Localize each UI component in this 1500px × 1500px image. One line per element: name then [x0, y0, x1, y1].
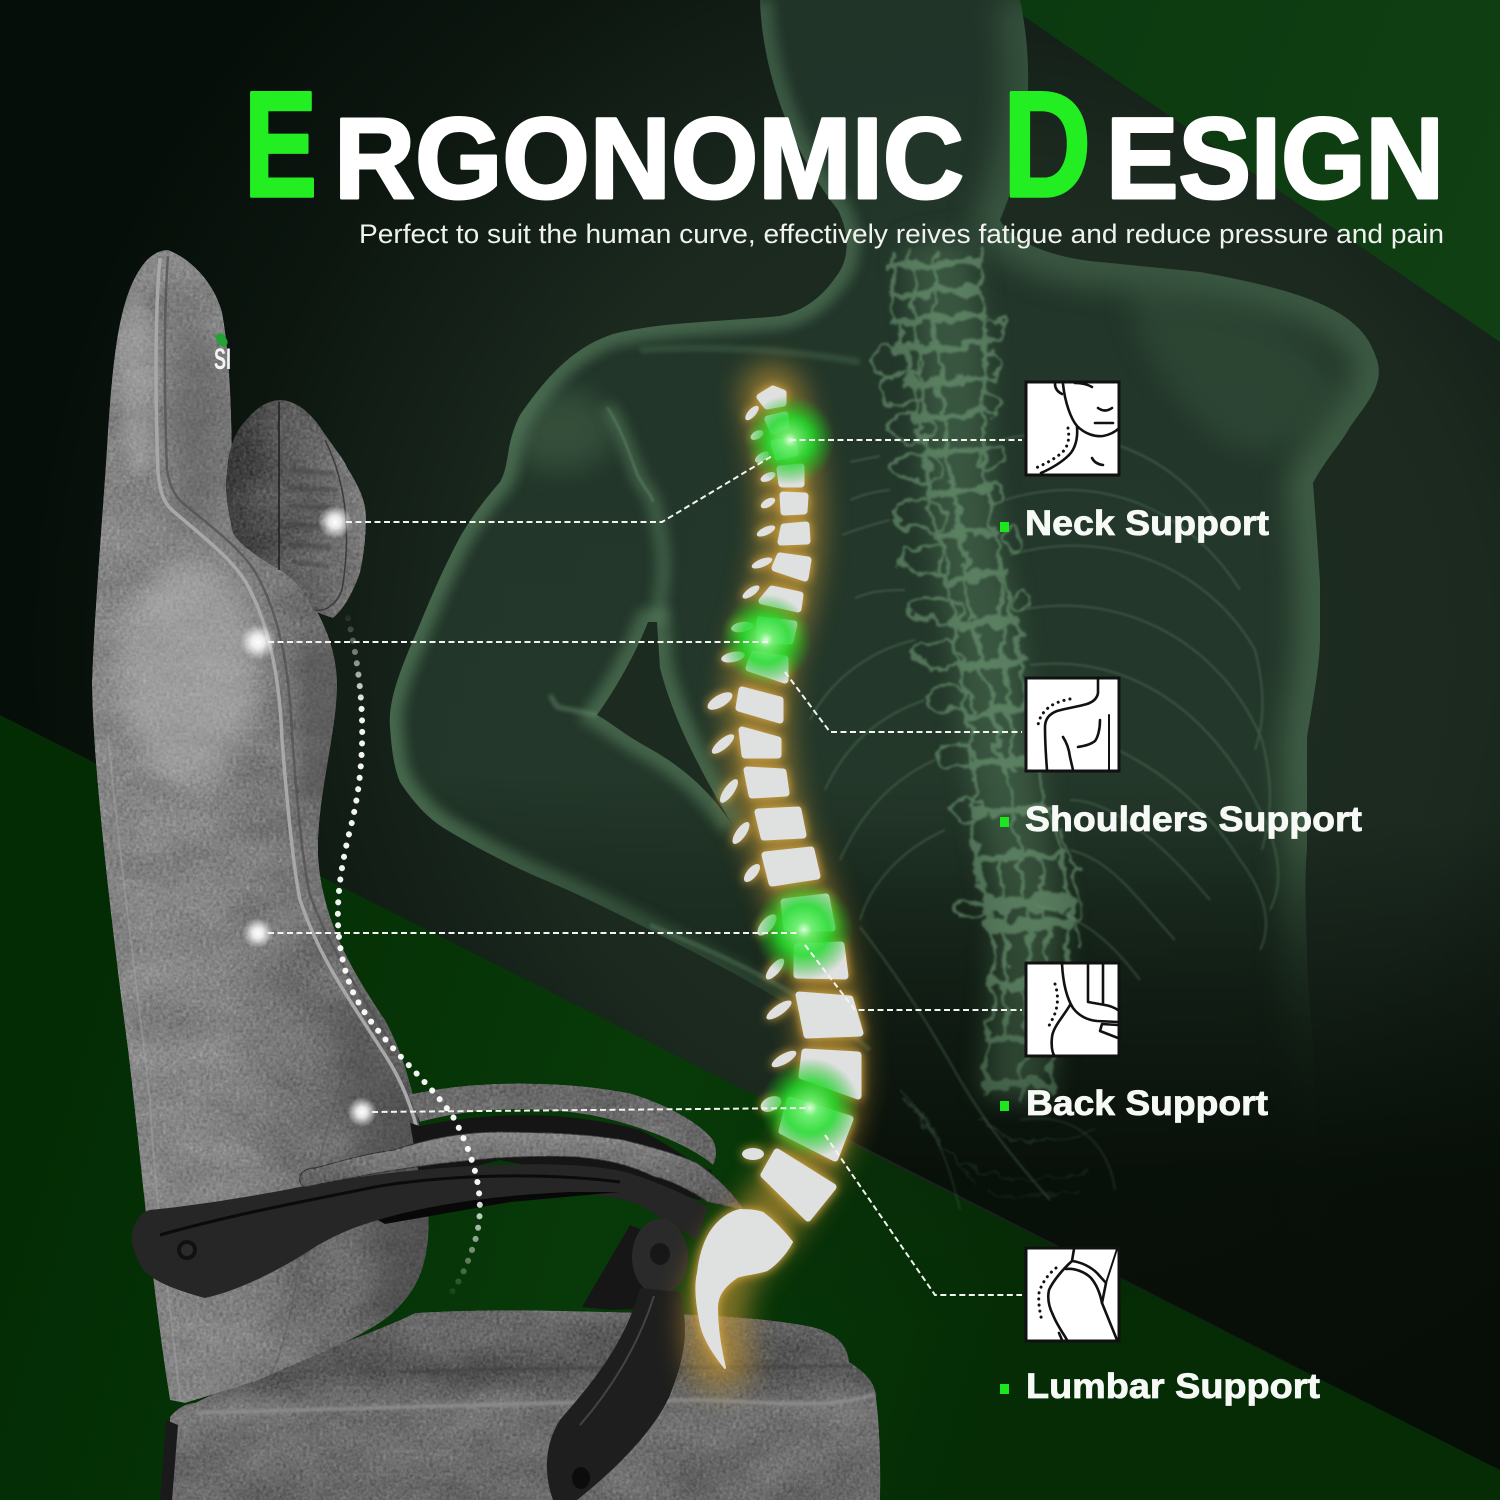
subtitle: Perfect to suit the human curve, effectively reives fatigue and reduce pressure and pain: [359, 219, 1444, 249]
title: RGONOMIC: [334, 95, 964, 223]
title: ESIGN: [1106, 95, 1444, 223]
bullet: [1000, 817, 1009, 827]
green pressure glows: [720, 395, 860, 1158]
dashed leader lines: [268, 440, 1022, 1295]
white chair points: [240, 505, 377, 1127]
bullet: [1000, 1101, 1009, 1111]
spine glow band: [715, 395, 832, 1360]
bullet: [1000, 522, 1009, 532]
bullet: [1000, 1384, 1009, 1394]
chair back: [92, 250, 429, 1403]
human body silhouette: [390, 0, 1379, 1002]
front armrest pad: [300, 1132, 744, 1210]
feature: lumbar support: [1000, 1248, 1320, 1406]
lower darkening: [800, 820, 1500, 1470]
brand logo: [214, 333, 231, 376]
feature: back support: [1000, 963, 1268, 1123]
back armrest: [408, 1083, 716, 1200]
support strut: [582, 1225, 668, 1310]
title: E: [244, 60, 317, 228]
title: [244, 60, 1444, 228]
left processes: [871, 343, 986, 916]
rails: [890, 250, 1070, 1100]
right processes: [980, 318, 1080, 950]
chair back shading: [108, 256, 440, 1400]
icon: neck: [1026, 382, 1119, 475]
title: D: [1003, 60, 1091, 228]
icon: back: [1026, 963, 1119, 1056]
spine bones: [696, 389, 860, 1368]
label: Shoulders Support: [1025, 800, 1362, 839]
neck pillow: [226, 400, 366, 618]
icon: lumbar: [1026, 1248, 1119, 1341]
gaming chair: [92, 250, 880, 1500]
cross bars: [890, 262, 1070, 1085]
label: Lumbar Support: [1026, 1367, 1320, 1406]
pelvis: [905, 1100, 1090, 1197]
label: Back Support: [1026, 1084, 1268, 1123]
feature: shoulders support: [1000, 678, 1362, 839]
brand logo: SI: [214, 343, 231, 376]
chair seat base: [168, 1310, 880, 1500]
feature: neck support: [1000, 382, 1269, 543]
front armrest black: [132, 1164, 708, 1298]
rib cage: [650, 434, 1278, 1210]
icon: shoulder: [1026, 678, 1119, 771]
arm pivot and leg: [547, 1219, 688, 1500]
x-ray spine: [871, 240, 1090, 1197]
dotted posture curve: [338, 618, 480, 1292]
label: Neck Support: [1025, 504, 1269, 543]
